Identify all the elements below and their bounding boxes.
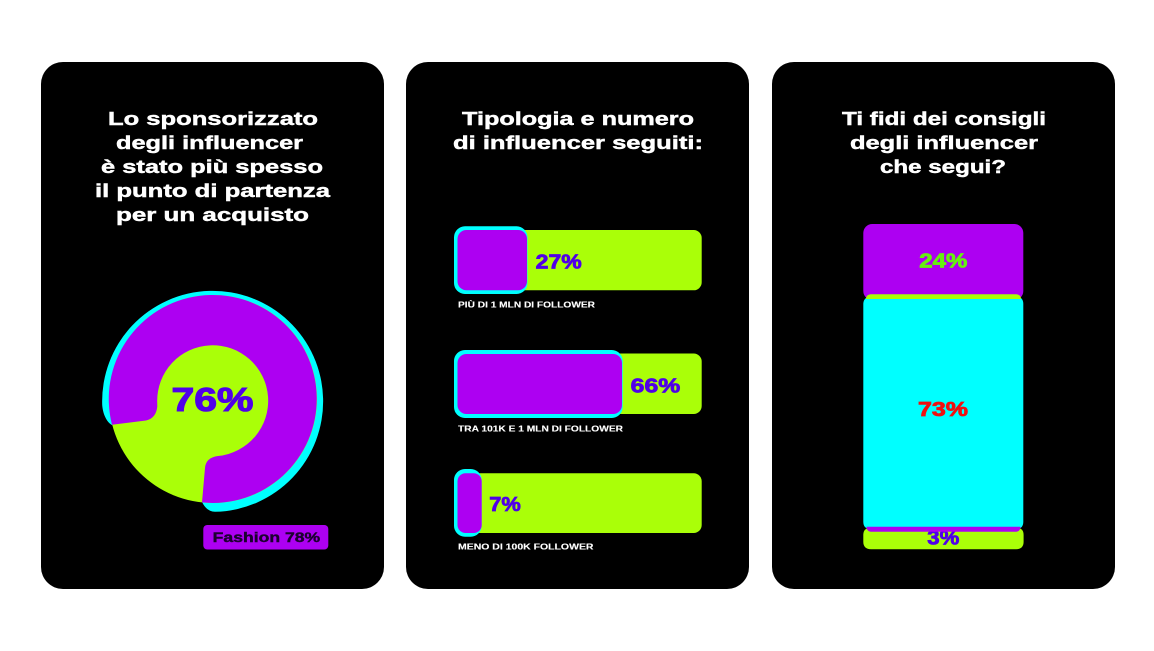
- bar: under 100K followers 7%: [454, 469, 702, 551]
- heading: trust in influencers: che segui?: [880, 157, 1006, 177]
- panel: trust in influencers: [772, 62, 1115, 589]
- segment: 24%: [863, 224, 1023, 300]
- heading: influencer types: [453, 109, 703, 153]
- segment: 73%: 73%: [918, 399, 968, 421]
- donut chart: 76%: [102, 291, 323, 512]
- segment: 73%: [863, 294, 1023, 532]
- heading: sponsored purchases: Lo sponsorizzato: [108, 109, 318, 129]
- bar: over 1M followers 27%: [454, 226, 702, 309]
- donut value: 76%: [172, 381, 254, 418]
- bar: 101K to 1M followers 66%: TRA 101K E 1 MLN DI FOLLOWER: [458, 424, 623, 434]
- heading: influencer types: Tipologia e numero: [462, 109, 694, 129]
- bar: 101K to 1M followers 66%: 66%: [631, 375, 680, 397]
- heading: sponsored purchases: il punto di partenza: [95, 181, 331, 201]
- bar: over 1M followers 27%: 27%: [536, 251, 582, 273]
- segment: 3%: 3%: [927, 528, 960, 550]
- callout: fashion 78%: [203, 525, 328, 550]
- bar: under 100K followers 7%: 7%: [489, 494, 521, 516]
- bar: over 1M followers 27%: PIÙ DI 1 MLN DI FOLLOWER: [458, 298, 595, 309]
- heading: sponsored purchases: è stato più spesso: [101, 157, 323, 177]
- bar: 101K to 1M followers 66%: [454, 350, 702, 434]
- callout: fashion 78%: Fashion 78%: [213, 529, 321, 545]
- segment: 3%: [863, 528, 1024, 550]
- heading: sponsored purchases: degli influencer: [116, 133, 303, 153]
- heading: trust in influencers: degli influencer: [850, 133, 1038, 153]
- segment: 24%: 24%: [919, 251, 968, 273]
- heading: sponsored purchases: per un acquisto: [116, 205, 309, 225]
- stacked bar chart: [863, 224, 1024, 550]
- heading: trust in influencers: [842, 109, 1046, 177]
- panel: influencer types: [406, 62, 749, 589]
- heading: influencer types: di influencer seguiti:: [453, 133, 703, 153]
- bar: under 100K followers 7%: MENO DI 100K FOLLOWER: [458, 541, 594, 551]
- heading: trust in influencers: Ti fidi dei consigli: [842, 109, 1046, 129]
- panel: sponsored purchases: [41, 62, 384, 589]
- heading: sponsored purchases: [95, 109, 331, 225]
